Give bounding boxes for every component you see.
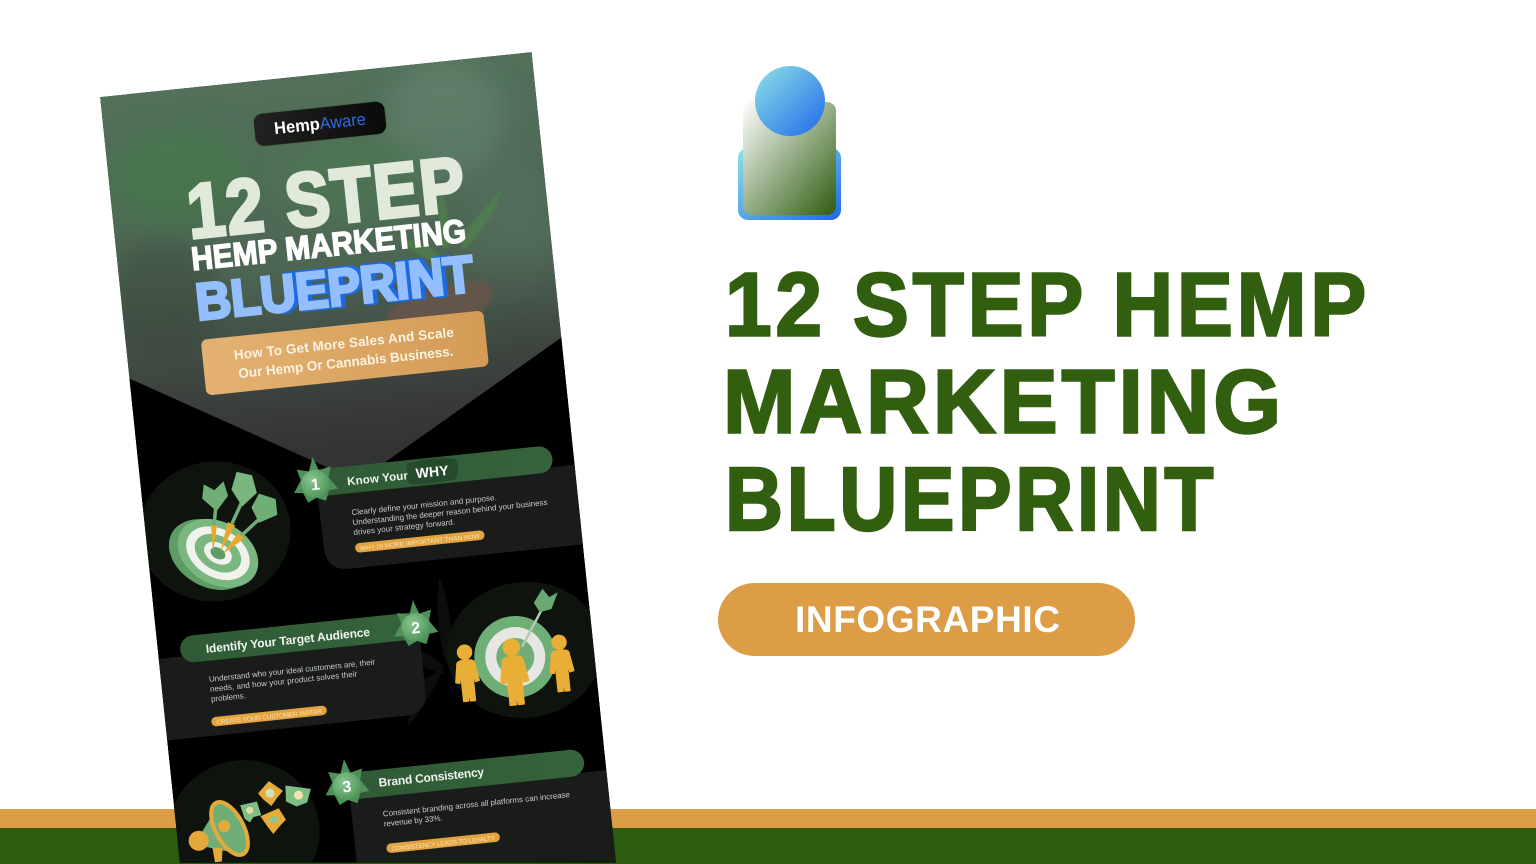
- step 1 heading: Know Your: [347, 470, 409, 488]
- step 1 heading emphasis: WHY: [415, 462, 450, 481]
- step 3 body: [383, 793, 570, 826]
- step 2 body: Understand who your ideal customers are, their: [208, 658, 376, 684]
- step 2 body: needs, and how your product solves their: [210, 669, 358, 694]
- step 1 body: Understanding the deeper reason behind your business: [352, 498, 548, 527]
- bottom band: orange stripe: [0, 809, 1536, 828]
- step 2 badge: 2: [410, 620, 421, 638]
- step 2 body: problems.: [211, 691, 246, 704]
- step 2 illustration backdrop: [448, 582, 596, 718]
- step 1 badge: 1: [310, 476, 321, 494]
- panel: tilted infographic poster: [80, 51, 625, 864]
- category pill: INFOGRAPHIC: [795, 599, 1060, 640]
- title: BLUEPRINT: BLUEPRINT: [196, 245, 480, 332]
- step 3 body: Consistent branding across all platforms can increase: [382, 790, 571, 819]
- step 2 heading: Identify Your Target Audience: [205, 625, 371, 656]
- title: BLUEPRINT: BLUEPRINT: [193, 245, 477, 332]
- step 3 badge: [326, 759, 370, 805]
- subtitle banner: [201, 310, 489, 396]
- step 2 body: [208, 658, 378, 704]
- step 3 illustration backdrop: [174, 760, 320, 863]
- main heading: MARKETING: [723, 352, 1285, 452]
- step 3: [174, 750, 616, 863]
- hemp plant leaves: [398, 190, 502, 260]
- faint background leaf: [408, 578, 451, 726]
- step 1 illustration backdrop: [143, 462, 290, 602]
- title: 12 STEP: 12 STEP: [183, 141, 470, 255]
- step 3 card: [350, 770, 616, 864]
- step 3 body: revenue by 33%.: [383, 813, 443, 828]
- step 3 heading: Brand Consistency: [378, 765, 485, 790]
- category pill: [718, 583, 1135, 656]
- step 1: [143, 446, 583, 602]
- step 2 card: [159, 632, 428, 741]
- step 1 badge: [294, 457, 338, 503]
- subtitle banner: How To Get More Sales And Scale: [233, 325, 455, 362]
- icon: abstract gradient badge: [738, 66, 841, 220]
- step 1 header bar: [314, 445, 554, 497]
- icon: megaphone with social tags: [188, 781, 311, 862]
- subtitle banner: Our Hemp Or Cannabis Business.: [238, 344, 454, 381]
- logo pill: HempAware: [273, 110, 367, 138]
- step 3 tag: CONSISTENCY LEADS TO LOYALTY: [391, 835, 496, 853]
- step 1 tag: WHY IS MORE IMPORTANT THAN HOW: [360, 533, 480, 552]
- step 2 tag: CREATE YOUR CUSTOMER AVATAR: [216, 708, 323, 726]
- bottom band: green stripe: [0, 828, 1536, 864]
- main heading: [723, 256, 1370, 550]
- main heading: BLUEPRINT: [725, 450, 1217, 550]
- brush behind WHY: [406, 458, 458, 484]
- step 3 header bar: [345, 748, 585, 800]
- title: HEMP MARKETING: HEMP MARKETING: [189, 212, 468, 277]
- step 1 body: drives your strategy forward.: [353, 518, 455, 537]
- logo pill: [253, 101, 387, 147]
- step 2 badge: [394, 600, 438, 646]
- people: [455, 634, 574, 706]
- icon: target with people: [455, 588, 574, 706]
- step 1 body: Clearly define your mission and purpose.: [351, 493, 497, 517]
- step 1 card: [317, 464, 589, 571]
- step 2 header bar: [179, 612, 417, 664]
- step 2: [158, 582, 596, 740]
- icon: target with darts: [168, 472, 278, 590]
- hand holding plant: [386, 280, 494, 320]
- main heading: 12 STEP HEMP: [725, 256, 1370, 356]
- step 3 badge: 3: [342, 779, 352, 797]
- hero photo background: [80, 51, 581, 519]
- dark section chevron: [129, 333, 575, 517]
